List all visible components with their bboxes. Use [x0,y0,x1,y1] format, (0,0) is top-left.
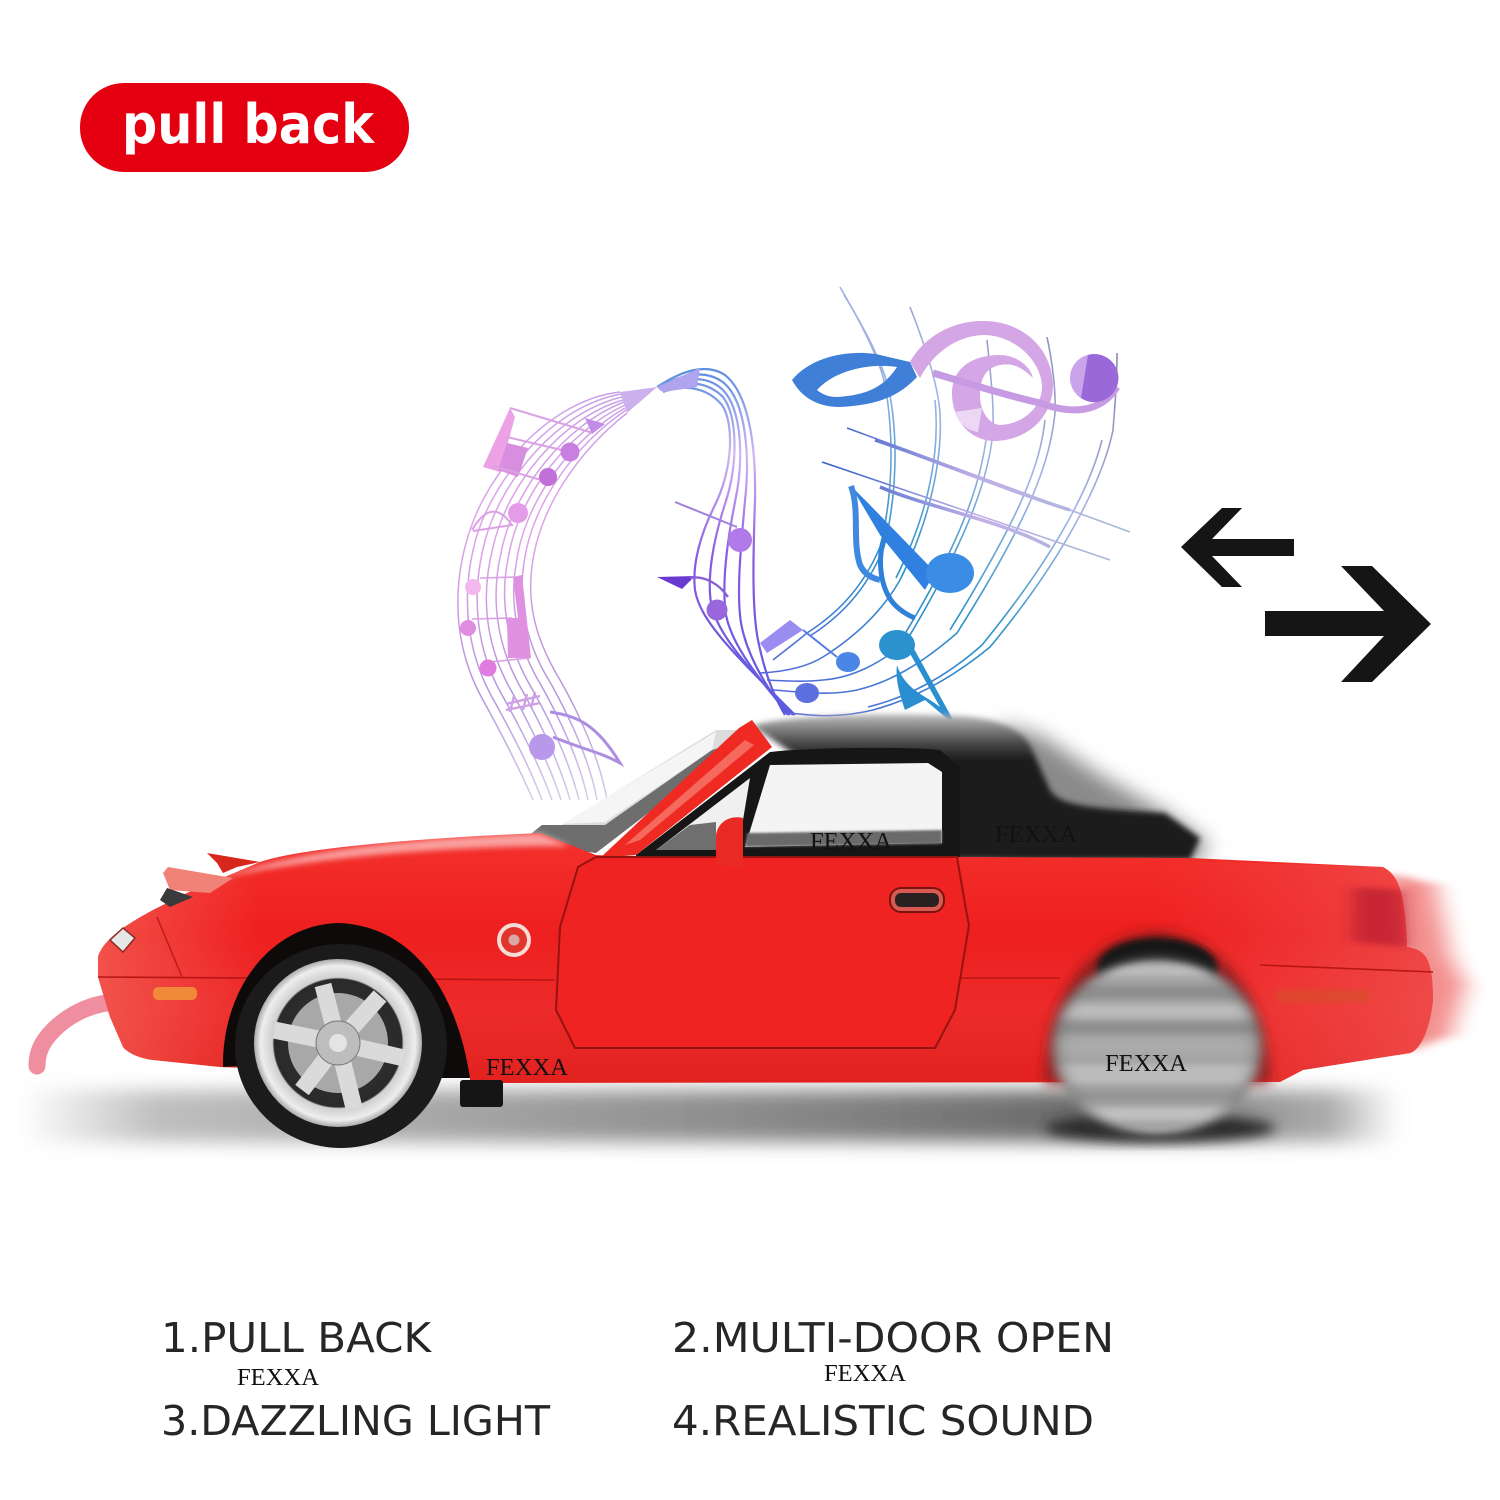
front lightening [98,862,260,1067]
clef stroke [933,373,1117,410]
blue notes [760,486,974,727]
A pillar [600,720,772,858]
door handle [890,888,944,912]
window frame [636,748,960,858]
stem [803,630,837,657]
rear lightening [1150,860,1433,1082]
tail light [1353,887,1407,947]
rear tyre top [1097,938,1217,998]
violet note upper [675,502,752,552]
beam block [760,620,803,653]
roof blur fade [1000,725,1210,862]
badge: pull back: pull back [122,93,375,156]
pink note heads [472,442,580,531]
sharps [506,692,540,712]
watermarks: FEXXA [1105,1051,1188,1077]
front wheel arch [223,923,470,1078]
rear wheel blurred [1050,960,1265,1140]
rear wheel arch [1045,932,1270,1083]
feature list [161,1314,1114,1445]
violet note lower [657,576,728,620]
rear hood flap [207,853,260,873]
side window lower reflection [745,830,942,847]
pink beam block lower [498,443,528,477]
watermarks [237,822,1188,1391]
amber rear [1277,990,1370,1002]
watermarks: FEXXA [486,1055,569,1081]
side marker [497,923,531,957]
pink beamed notes [460,575,531,676]
arrows [1181,508,1431,682]
clef spiral [910,321,1053,441]
amber marker [153,987,197,1000]
cross staff lines [822,428,1130,560]
music notes: violet ribbon [657,368,795,715]
windshield [527,730,741,853]
feature 2: 2.MULTI-DOOR OPEN [672,1314,1114,1362]
popped hood [163,867,233,893]
neck of ribbon [620,387,657,413]
front wheel [235,944,447,1148]
watermarks: FEXXA [995,822,1078,848]
tail note [897,647,957,727]
pink beam block [483,408,515,472]
main body [98,833,1433,1083]
quarter glass [656,778,750,850]
badge: pull back [80,83,409,172]
pink cable [37,1002,120,1066]
car ground shadow [20,1090,1400,1142]
fish note [792,353,917,407]
feature 1: 1.PULL BACK [161,1314,432,1362]
watermarks: FEXXA [824,1361,907,1387]
rear motion blur [1385,872,1465,1052]
treble clef and note [792,321,1118,441]
rear wheel ring [1055,959,1259,1135]
watermarks: FEXXA [237,1365,320,1391]
small notes [795,630,915,703]
feature 4: 4.REALISTIC SOUND [672,1397,1094,1445]
big beamed note [851,486,974,618]
creases [98,965,1433,980]
headlight [110,928,135,952]
watermarks: FEXXA [810,829,893,855]
arrow: right [1265,566,1431,682]
clef highlight [955,408,982,432]
side window glass [745,763,942,847]
feature 3: 3.DAZZLING LIGHT [161,1397,551,1445]
windshield lower trim [527,742,741,853]
mudflap [460,1080,503,1107]
quarter glass lower [656,822,716,850]
door [556,857,969,1048]
hood seam [157,917,182,977]
windshield glass light [562,732,716,824]
A pillar highlight [625,740,754,845]
music notes: blue staff [760,287,1130,716]
black roof [752,714,1200,860]
engine bay [160,888,193,907]
clef ball [1070,354,1118,402]
bottom note [529,712,620,763]
arrow: left [1181,508,1294,587]
hood highlight [215,833,570,880]
car [98,714,1465,1148]
violet neck [657,368,700,392]
pink beam lines [493,408,593,482]
music notes: pink staff [458,387,657,800]
side mirror [716,817,743,867]
pink triangle [585,418,605,434]
